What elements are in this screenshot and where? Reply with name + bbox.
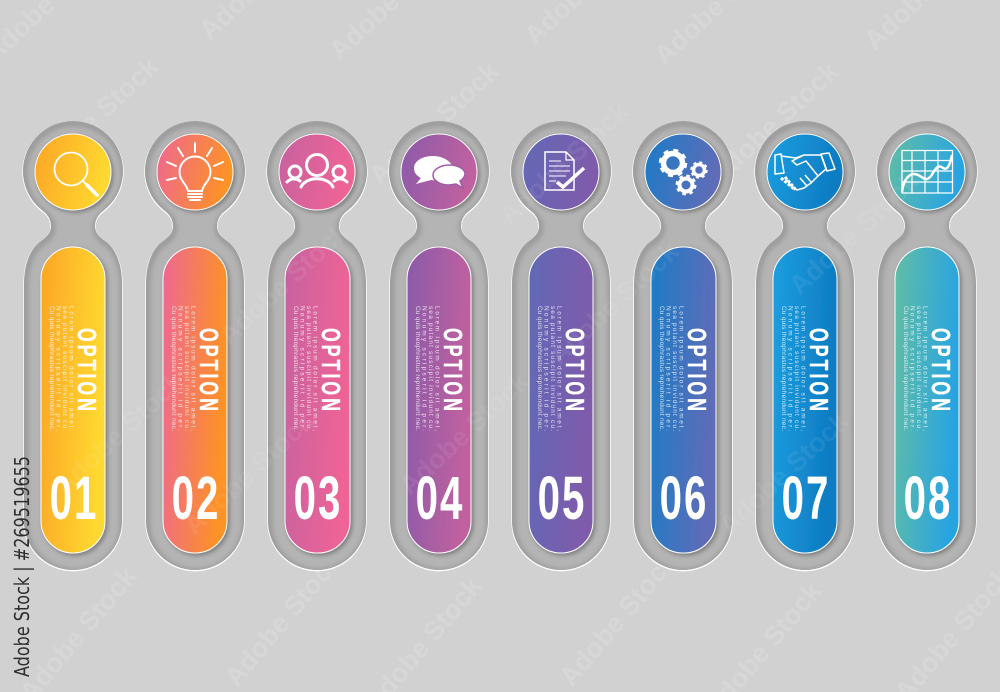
watermark pattern: Adobe Stock bbox=[23, 51, 165, 186]
column 04 bbox=[389, 121, 490, 572]
body text 02 bbox=[170, 306, 196, 431]
circle 02 bbox=[157, 134, 233, 210]
stock credit: Adobe Stock | #269519655 bbox=[10, 456, 34, 677]
body text 07 bbox=[780, 306, 806, 431]
watermark overlay bbox=[48, 96, 925, 541]
icon: handshake bbox=[775, 153, 835, 190]
slot 03 bbox=[267, 121, 368, 572]
body text 05: Cu quis theophrastus reprehendunt nec. bbox=[536, 306, 543, 431]
slot 02 bbox=[145, 121, 246, 572]
icon: speech bubbles bbox=[414, 156, 465, 188]
body text 02: Nonumy scripserit id per. bbox=[176, 306, 184, 431]
watermark pattern: Adobe Stock bbox=[363, 56, 505, 191]
icon: line chart on grid bbox=[902, 150, 952, 193]
body text 05 bbox=[536, 306, 562, 431]
icon: magnifier bbox=[54, 152, 97, 195]
pill 05 bbox=[529, 247, 593, 553]
icon: document with check bbox=[545, 152, 584, 190]
body text 04: Lorem ipsum dolor sit amet, bbox=[434, 306, 440, 431]
pill 01 bbox=[41, 247, 105, 553]
number 04: 04 bbox=[416, 464, 464, 532]
body text 04: Nonumy scripserit id per. bbox=[420, 306, 428, 431]
body text 01: Cu quis theophrastus reprehendunt nec. bbox=[48, 306, 55, 431]
pill 02 bbox=[163, 247, 227, 553]
pill 03 bbox=[285, 247, 350, 553]
circle 03 bbox=[279, 134, 355, 210]
slot 06 bbox=[633, 121, 734, 572]
heading 08: OPTION bbox=[926, 328, 955, 411]
number 08: 08 bbox=[904, 464, 952, 532]
pill 06 bbox=[651, 247, 716, 553]
circle 06 bbox=[645, 134, 721, 210]
slot 08 bbox=[877, 121, 978, 572]
body text 06 bbox=[658, 306, 684, 431]
column 01 bbox=[23, 121, 124, 572]
heading 03: OPTION bbox=[316, 328, 345, 411]
watermark overlay: Adobe Stock bbox=[543, 236, 685, 371]
body text 08: Cu quis theophrastus reprehendunt nec. bbox=[902, 306, 909, 431]
body text 04: sea putant suscipit invidunt cu. bbox=[427, 306, 434, 431]
icon: light bulb bbox=[167, 143, 223, 200]
number 06: 06 bbox=[660, 464, 708, 532]
body text 01 bbox=[48, 306, 74, 431]
watermark overlay: Adobe Stock bbox=[178, 406, 320, 541]
heading 01: OPTION bbox=[72, 328, 101, 411]
body text 02: sea putant suscipit invidunt cu. bbox=[183, 306, 190, 431]
body text 05: sea putant suscipit invidunt cu. bbox=[549, 306, 556, 431]
watermark overlay: Adobe Stock bbox=[713, 406, 855, 541]
watermark overlay: Adobe Stock bbox=[48, 366, 190, 501]
body text 05: Lorem ipsum dolor sit amet, bbox=[556, 306, 562, 431]
pill 04 bbox=[407, 247, 471, 553]
circle 07 bbox=[767, 134, 843, 210]
body text 03: Nonumy scripserit id per. bbox=[298, 306, 306, 431]
heading 04: OPTION bbox=[438, 328, 467, 411]
number 05: 05 bbox=[538, 464, 586, 532]
body text 05: Nonumy scripserit id per. bbox=[542, 306, 550, 431]
watermark pattern: Adobe Stock bbox=[554, 546, 683, 692]
heading 06: OPTION bbox=[682, 328, 711, 411]
body text 01: sea putant suscipit invidunt cu. bbox=[61, 306, 68, 431]
number 07: 07 bbox=[782, 464, 830, 532]
body text 01: Nonumy scripserit id per. bbox=[54, 306, 62, 431]
body text 04: Cu quis theophrastus reprehendunt nec. bbox=[414, 306, 421, 431]
watermark overlay: Adobe Stock bbox=[393, 366, 535, 501]
column 08 bbox=[877, 121, 978, 572]
body text 01: Lorem ipsum dolor sit amet, bbox=[68, 306, 74, 431]
body text 06: Lorem ipsum dolor sit amet, bbox=[678, 306, 684, 431]
watermark pattern: Adobe Stock bbox=[219, 546, 348, 692]
body text 07: sea putant suscipit invidunt cu. bbox=[793, 306, 800, 431]
slot 05 bbox=[511, 121, 612, 572]
body text 06: Nonumy scripserit id per. bbox=[664, 306, 672, 431]
body text 07: Lorem ipsum dolor sit amet, bbox=[800, 306, 806, 431]
circle 04 bbox=[401, 134, 477, 210]
body text 03: Lorem ipsum dolor sit amet, bbox=[312, 306, 318, 431]
slot 01 bbox=[23, 121, 124, 572]
heading 02: OPTION bbox=[194, 328, 223, 411]
heading 05: OPTION bbox=[560, 328, 589, 411]
number 02: 02 bbox=[172, 464, 220, 532]
circle 08 bbox=[889, 134, 965, 210]
column 02 bbox=[145, 121, 246, 572]
number 03: 03 bbox=[294, 464, 342, 532]
body text 07: Cu quis theophrastus reprehendunt nec. bbox=[780, 306, 787, 431]
icon: people bbox=[287, 154, 347, 187]
body text 03: Cu quis theophrastus reprehendunt nec. bbox=[292, 306, 299, 431]
body text 04 bbox=[414, 306, 440, 431]
body text 02: Lorem ipsum dolor sit amet, bbox=[190, 306, 196, 431]
circle 05 bbox=[523, 134, 599, 210]
body text 02: Cu quis theophrastus reprehendunt nec. bbox=[170, 306, 177, 431]
column 05 bbox=[511, 121, 612, 572]
watermark overlay: Adobe Stock bbox=[213, 216, 355, 351]
body text 08 bbox=[902, 306, 928, 431]
body text 08: Lorem ipsum dolor sit amet, bbox=[922, 306, 928, 431]
column 03 bbox=[267, 121, 368, 572]
pill 07 bbox=[773, 247, 837, 553]
body text 06: sea putant suscipit invidunt cu. bbox=[671, 306, 678, 431]
pill 08 bbox=[895, 247, 959, 553]
body text 08: Nonumy scripserit id per. bbox=[908, 306, 916, 431]
slot 04 bbox=[389, 121, 490, 572]
slot 07 bbox=[755, 121, 856, 572]
column 07 bbox=[755, 121, 856, 572]
body text 07: Nonumy scripserit id per. bbox=[786, 306, 794, 431]
body text 03: sea putant suscipit invidunt cu. bbox=[305, 306, 312, 431]
watermark overlay: Adobe Stock bbox=[493, 96, 635, 231]
body text 03 bbox=[292, 306, 318, 431]
watermark pattern: Adobe Stock bbox=[703, 56, 845, 191]
icon: gears bbox=[660, 150, 706, 194]
number 01: 01 bbox=[50, 464, 98, 532]
body text 08: sea putant suscipit invidunt cu. bbox=[915, 306, 922, 431]
column 06 bbox=[633, 121, 734, 572]
heading 07: OPTION bbox=[804, 328, 833, 411]
body text 06: Cu quis theophrastus reprehendunt nec. bbox=[658, 306, 665, 431]
circle 01 bbox=[35, 134, 111, 210]
watermark overlay: Adobe Stock bbox=[783, 166, 925, 301]
